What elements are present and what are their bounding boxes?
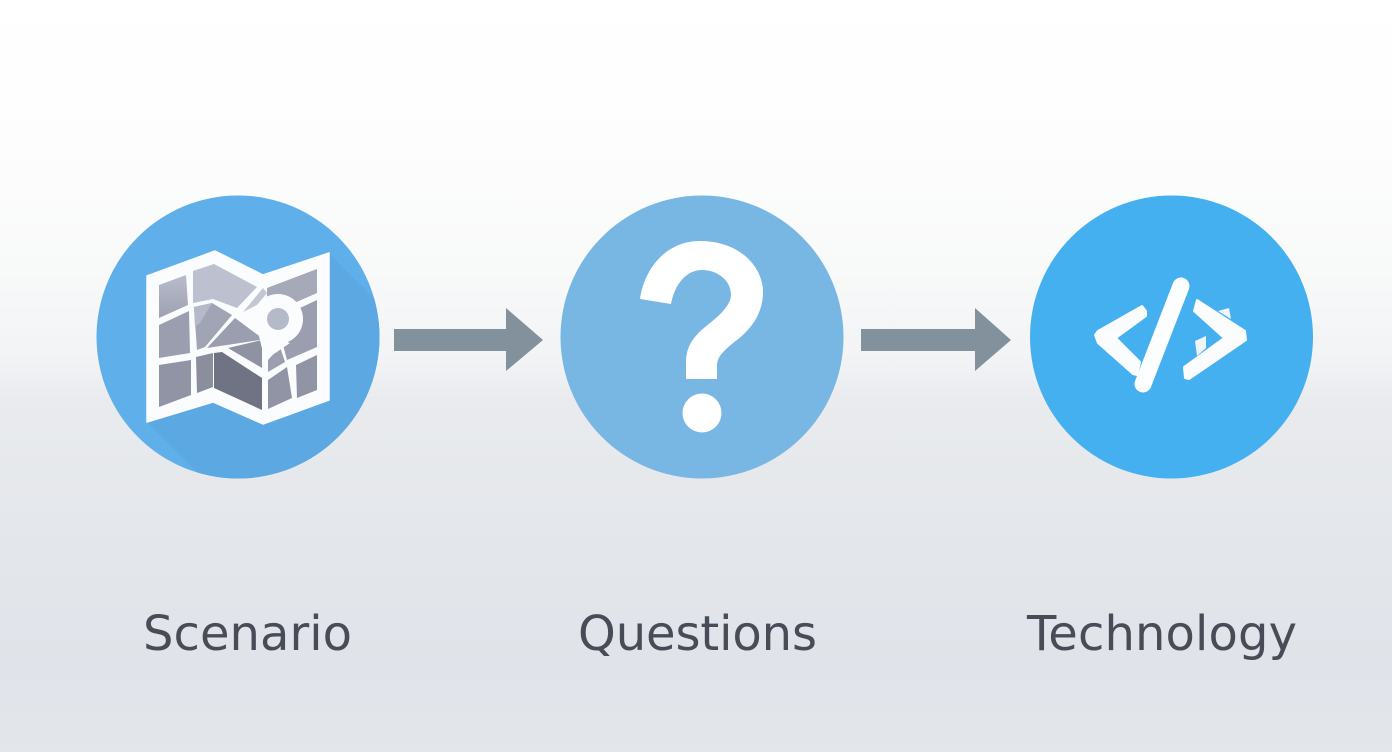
- infographic: three-step flow: [0, 196, 1392, 752]
- step 2: question mark icon: [560, 196, 844, 478]
- step 1: scenario map icon: [96, 196, 380, 478]
- map sheet: [147, 251, 329, 424]
- label: Scenario: Scenario: [143, 606, 352, 662]
- map panels: [159, 264, 317, 410]
- arrow 1: [394, 308, 543, 371]
- label: Questions: Questions: [578, 606, 817, 662]
- arrow 2: [861, 308, 1011, 371]
- step 3: code icon: [1030, 196, 1313, 478]
- label: Technology: Technology: [1026, 606, 1297, 662]
- map pin: [253, 294, 303, 361]
